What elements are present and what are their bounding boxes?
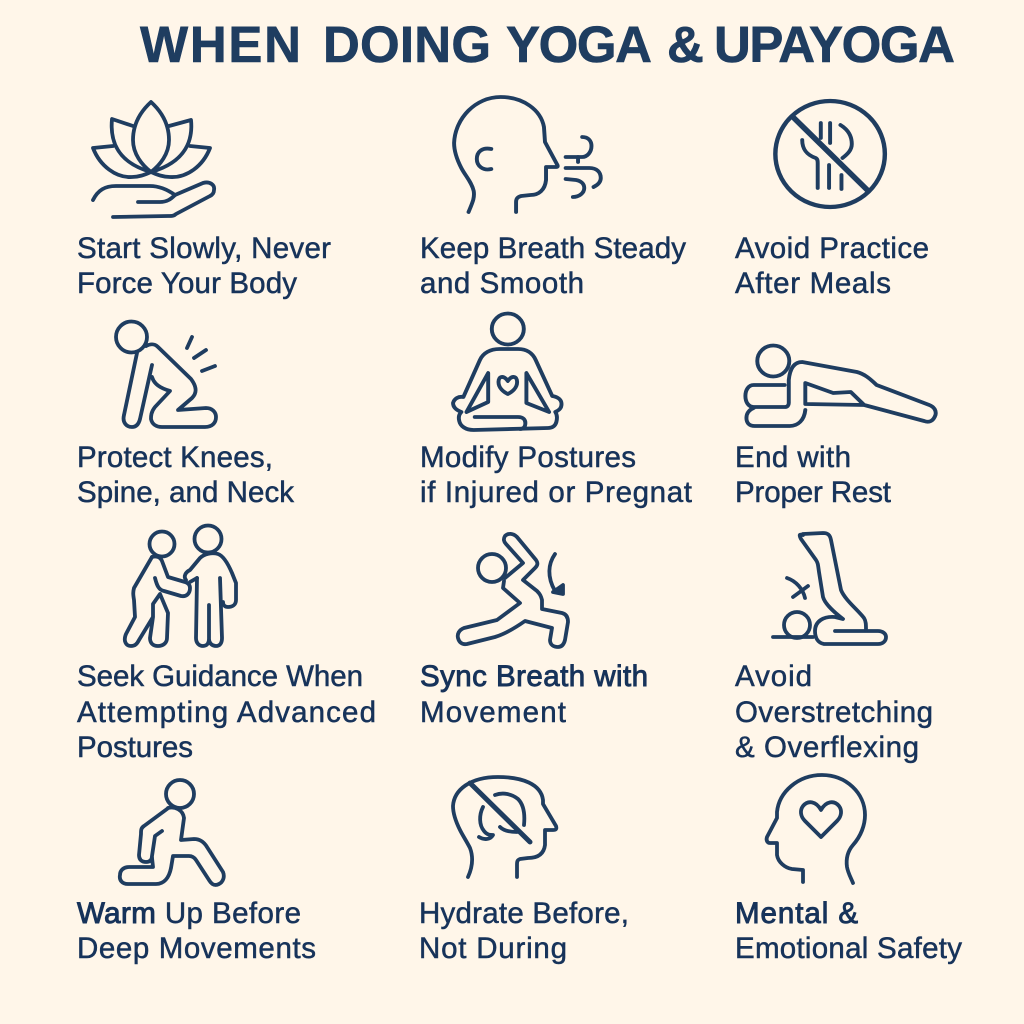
panel: end with proper rest [735,346,936,509]
label: warm up [77,897,316,965]
icon: two figures, one guiding [125,526,236,646]
icon: head with heart [767,775,865,883]
panel: seek guidance [77,526,376,764]
panel: modify postures [420,314,692,509]
label: sync breath [420,660,648,729]
label: start slowly: Start Slowly, Never [77,232,331,265]
title: UPAYOGA [714,16,955,73]
panel: mental safety [735,775,962,965]
icon: leg raised over ball, overstretch warning [773,533,886,644]
icon: lotus on open hand [93,102,214,217]
panel: sync breath [420,534,648,729]
panel: protect knees [77,322,294,509]
label: end with proper rest [735,441,891,509]
label: warm up: Deep Movements [77,932,316,965]
label: mental safety: Emotional Safety [735,932,962,965]
panel: avoid practice after meals [735,101,929,300]
label: seek guidance: Postures [77,731,193,764]
label: avoid overstretching [735,660,933,764]
label: mental safety [735,897,962,965]
label: warm up: Warm Up Before [77,897,301,930]
label: protect knees [77,441,294,509]
icon: head with no-water symbol [453,777,556,877]
icon: crossed-out cutlery [775,101,885,207]
label: avoid overstretching: & Overflexing [735,731,919,764]
label: modify postures: Modify Postures [420,441,636,474]
label: modify postures [420,441,692,509]
label: start slowly: Force Your Body [77,267,297,300]
label: sync breath: Movement [420,696,566,729]
label: protect knees: Protect Knees, [77,441,273,474]
label: end with proper rest: End with [735,441,851,474]
title: WHEN [140,16,301,73]
title: DOING [323,16,491,73]
label: hydrate: Not During [419,932,567,965]
panel: warm up [77,780,316,965]
label: mental safety: Mental & [735,897,858,930]
label: end with proper rest: Proper Rest [735,476,891,509]
icon: kneeling figure with back pain [116,322,216,427]
icon: meditating figure with heart [453,314,562,430]
label: avoid overstretching: Overstretching [735,696,933,729]
icon: head exhaling breath [454,97,601,212]
title: YOGA [506,16,652,73]
label: keep breath steady: Keep Breath Steady [420,232,686,265]
panel: avoid overstretching [735,533,933,764]
label: avoid overstretching: Avoid [735,660,812,693]
panel: start slowly [77,102,331,300]
label: seek guidance [77,660,376,764]
icon: figure in child's pose resting [745,346,936,426]
label: start slowly [77,232,331,300]
label: protect knees: Spine, and Neck [77,476,294,509]
label: hydrate [419,897,629,965]
label: avoid practice: After Meals [735,267,891,300]
label: keep breath steady [420,232,686,300]
label: avoid practice [735,232,929,300]
icon: lunge warm-up figure [120,780,224,885]
title: & [667,16,704,73]
title [140,16,955,73]
label: seek guidance: Seek Guidance When [77,660,363,693]
label: seek guidance: Attempting Advanced [77,696,376,729]
label: modify postures: if Injured or Pregnat [420,476,692,509]
label: keep breath steady: and Smooth [420,267,584,300]
label: avoid practice: Avoid Practice [735,232,929,265]
icon: lunging figure with arrow [458,534,568,647]
panel: keep breath steady [420,97,686,300]
panel: hydrate [419,777,629,965]
label: sync breath: Sync Breath with [420,660,648,693]
label: hydrate: Hydrate Before, [419,897,629,930]
